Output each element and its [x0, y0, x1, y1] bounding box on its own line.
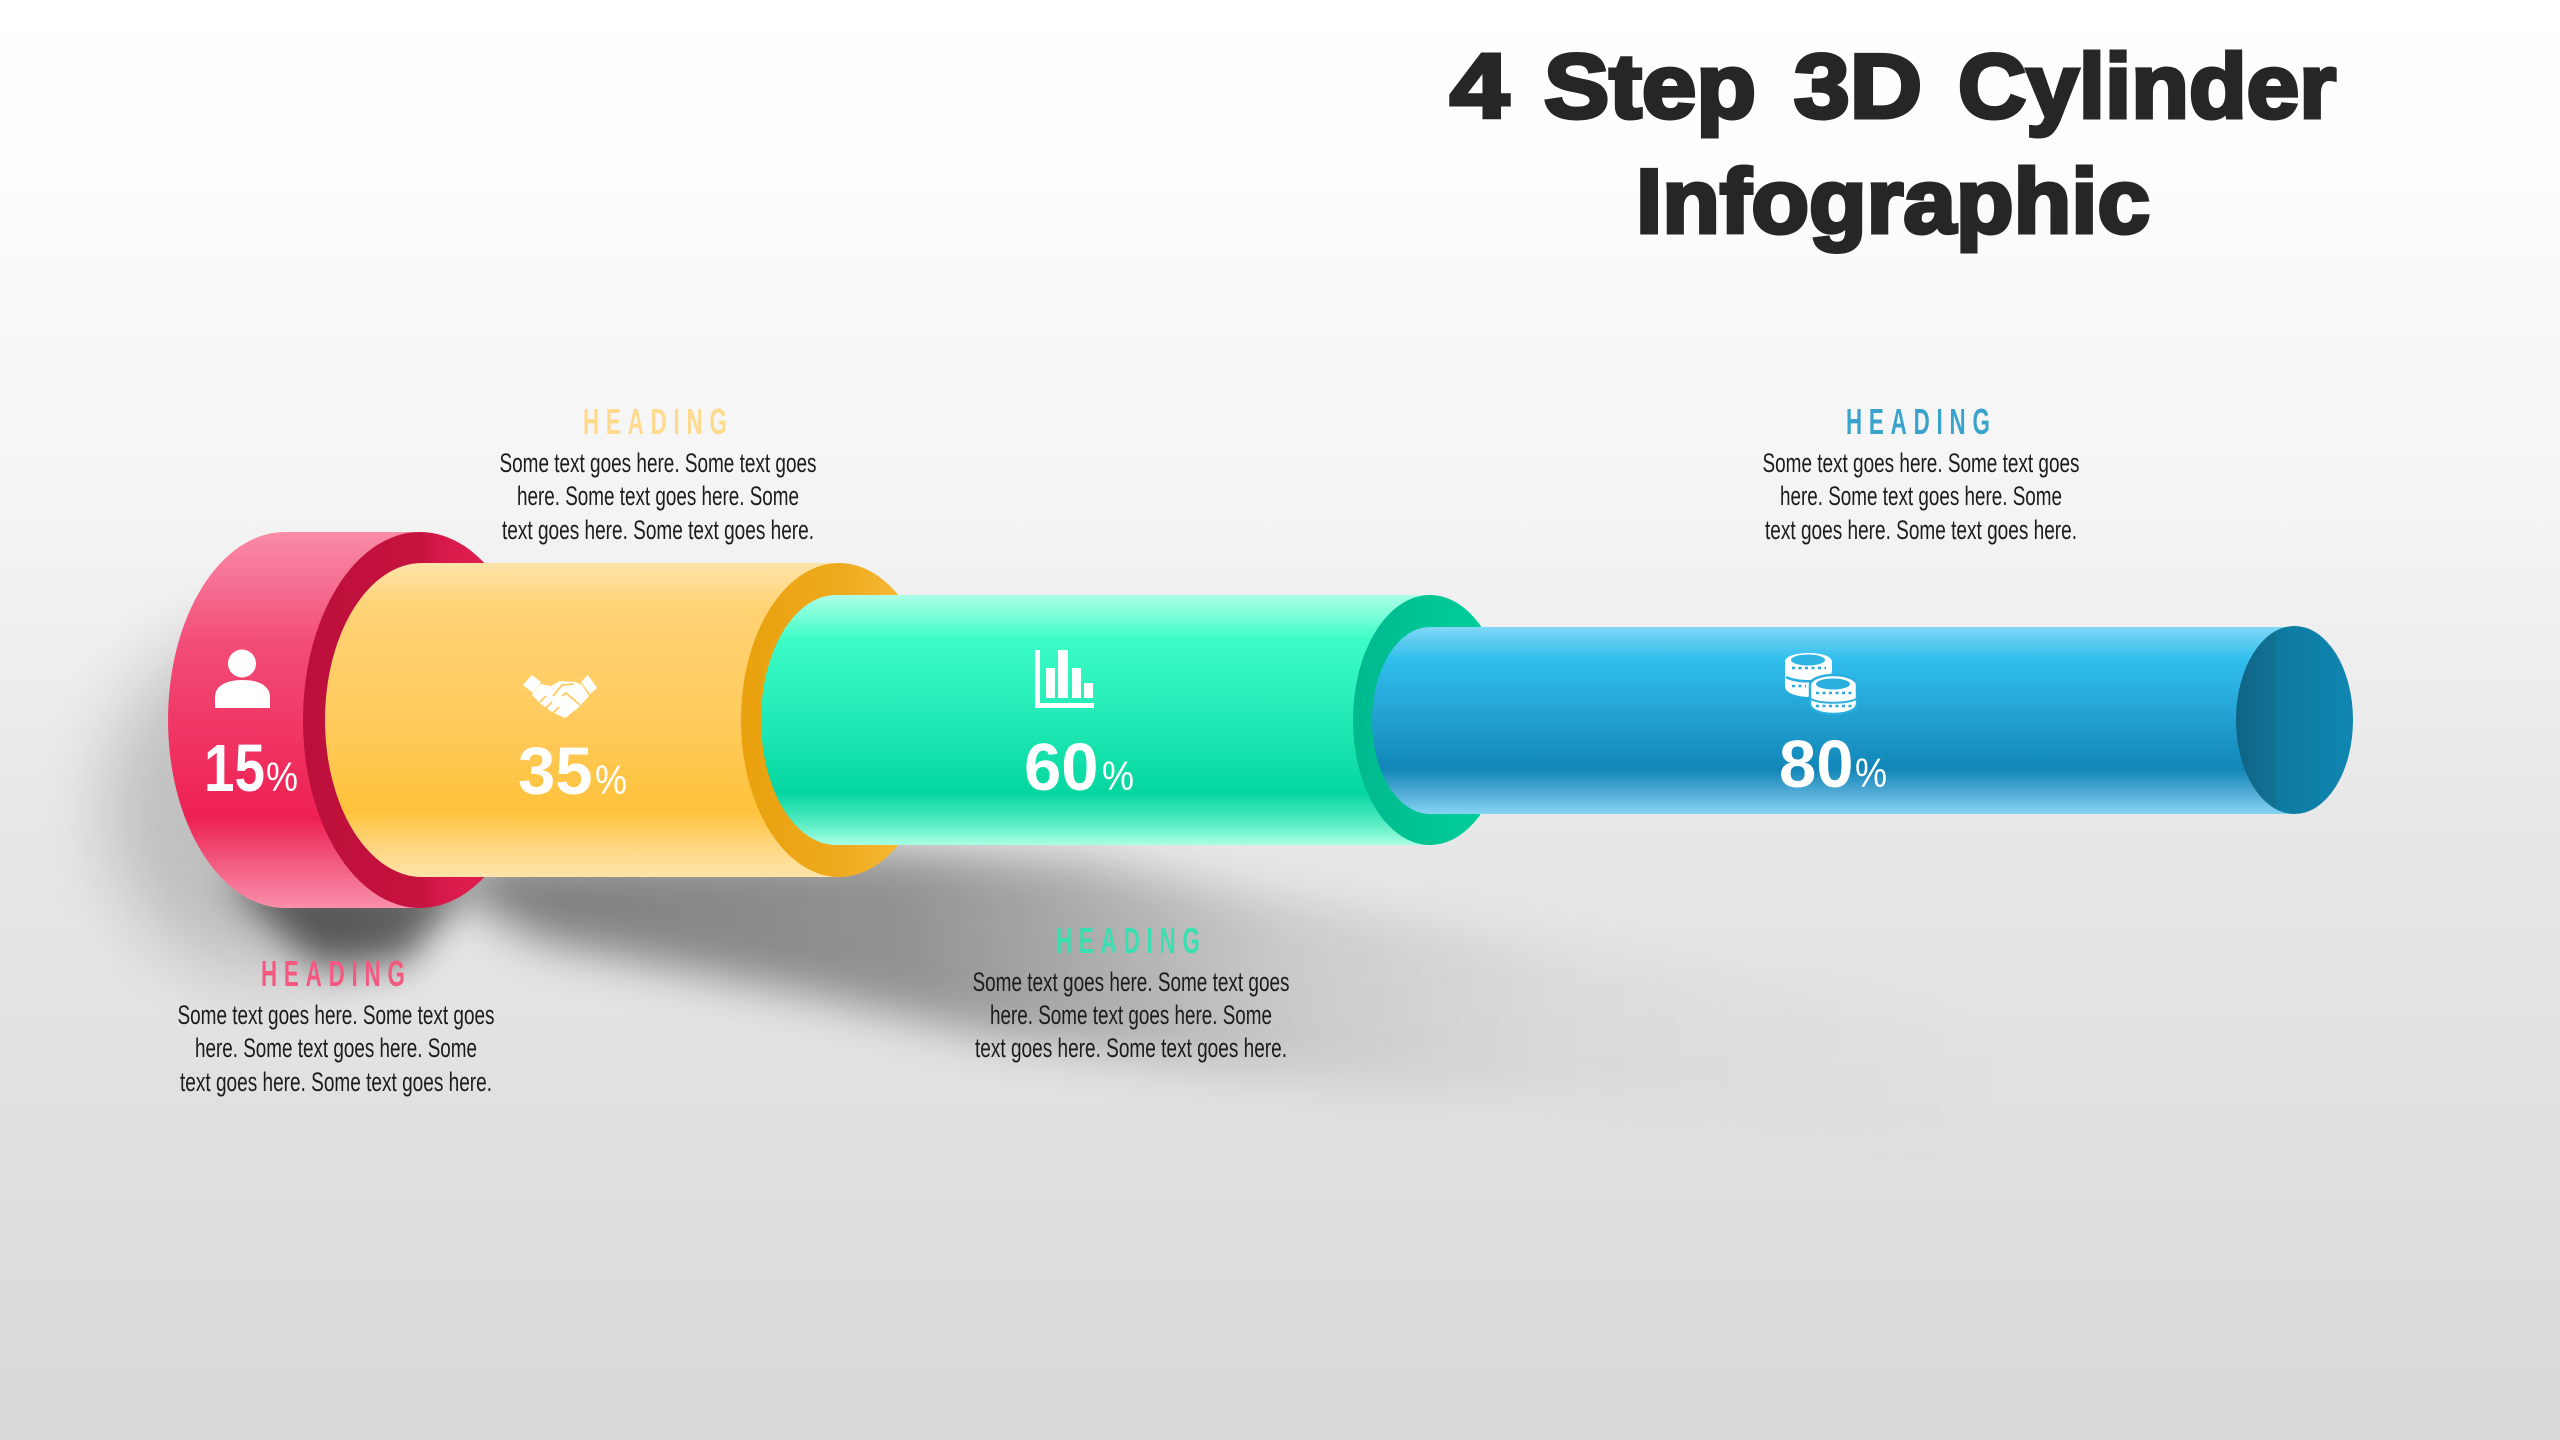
text block: green step: Some text goes here. Some text goes	[972, 967, 1290, 997]
title	[1450, 36, 2336, 252]
value: 80%: 80	[1779, 727, 1854, 802]
icon: handshake	[523, 675, 597, 718]
cylinder 3: green segment	[761, 595, 1507, 845]
text block: yellow step: here. Some text goes here. Some	[517, 481, 799, 511]
text block: red step: here. Some text goes here. Some	[195, 1033, 477, 1063]
cylinder 4: blue segment	[1372, 626, 2353, 814]
text block: yellow step: text goes here. Some text goes here.	[502, 515, 814, 545]
value: 35%: %	[595, 757, 627, 803]
text block: red step: text goes here. Some text goes here.	[180, 1067, 492, 1097]
heading: green step: HEADING	[1056, 922, 1207, 961]
heading: blue step: HEADING	[1846, 403, 1997, 442]
text block: blue step: text goes here. Some text goes here.	[1765, 515, 2077, 545]
heading: red step: HEADING	[261, 955, 412, 994]
title: 3D	[1794, 36, 1922, 138]
value: 35%: 35	[518, 734, 593, 809]
value: 80%	[1779, 727, 1887, 802]
text block: red step	[178, 1000, 494, 1097]
text block: red step: Some text goes here. Some text goes	[178, 1000, 494, 1030]
text block: green step: here. Some text goes here. Some	[990, 1000, 1272, 1030]
cylinder 2: yellow segment	[325, 563, 937, 877]
text block: yellow step	[500, 448, 816, 545]
title: Cylinder	[1958, 36, 2336, 138]
value: 60%: %	[1102, 753, 1134, 799]
text block: blue step: here. Some text goes here. Some	[1780, 481, 2062, 511]
icon: bar chart	[1035, 650, 1094, 708]
text block: green step	[972, 967, 1290, 1063]
icon: person	[215, 650, 270, 708]
text block: yellow step: Some text goes here. Some text goes	[500, 448, 816, 478]
cast shadow behind the cylinders	[105, 625, 2100, 1170]
value: 15%: 15	[204, 731, 265, 806]
value: 60%	[1024, 730, 1134, 805]
cylinder 1: red segment	[168, 532, 537, 908]
title: Step	[1544, 36, 1756, 138]
title: Infographic	[1636, 152, 2150, 252]
text block: blue step: Some text goes here. Some text goes	[1762, 448, 2080, 478]
value: 15%: %	[266, 754, 298, 800]
heading: yellow step: HEADING	[583, 403, 734, 442]
value: 60%: 60	[1024, 730, 1099, 805]
icon: coins	[1785, 653, 1857, 714]
title: 4	[1450, 36, 1509, 138]
text block: blue step	[1762, 448, 2080, 545]
value: 35%	[518, 734, 627, 809]
text block: green step: text goes here. Some text goes here.	[975, 1033, 1287, 1063]
value: 80%: %	[1855, 750, 1887, 796]
